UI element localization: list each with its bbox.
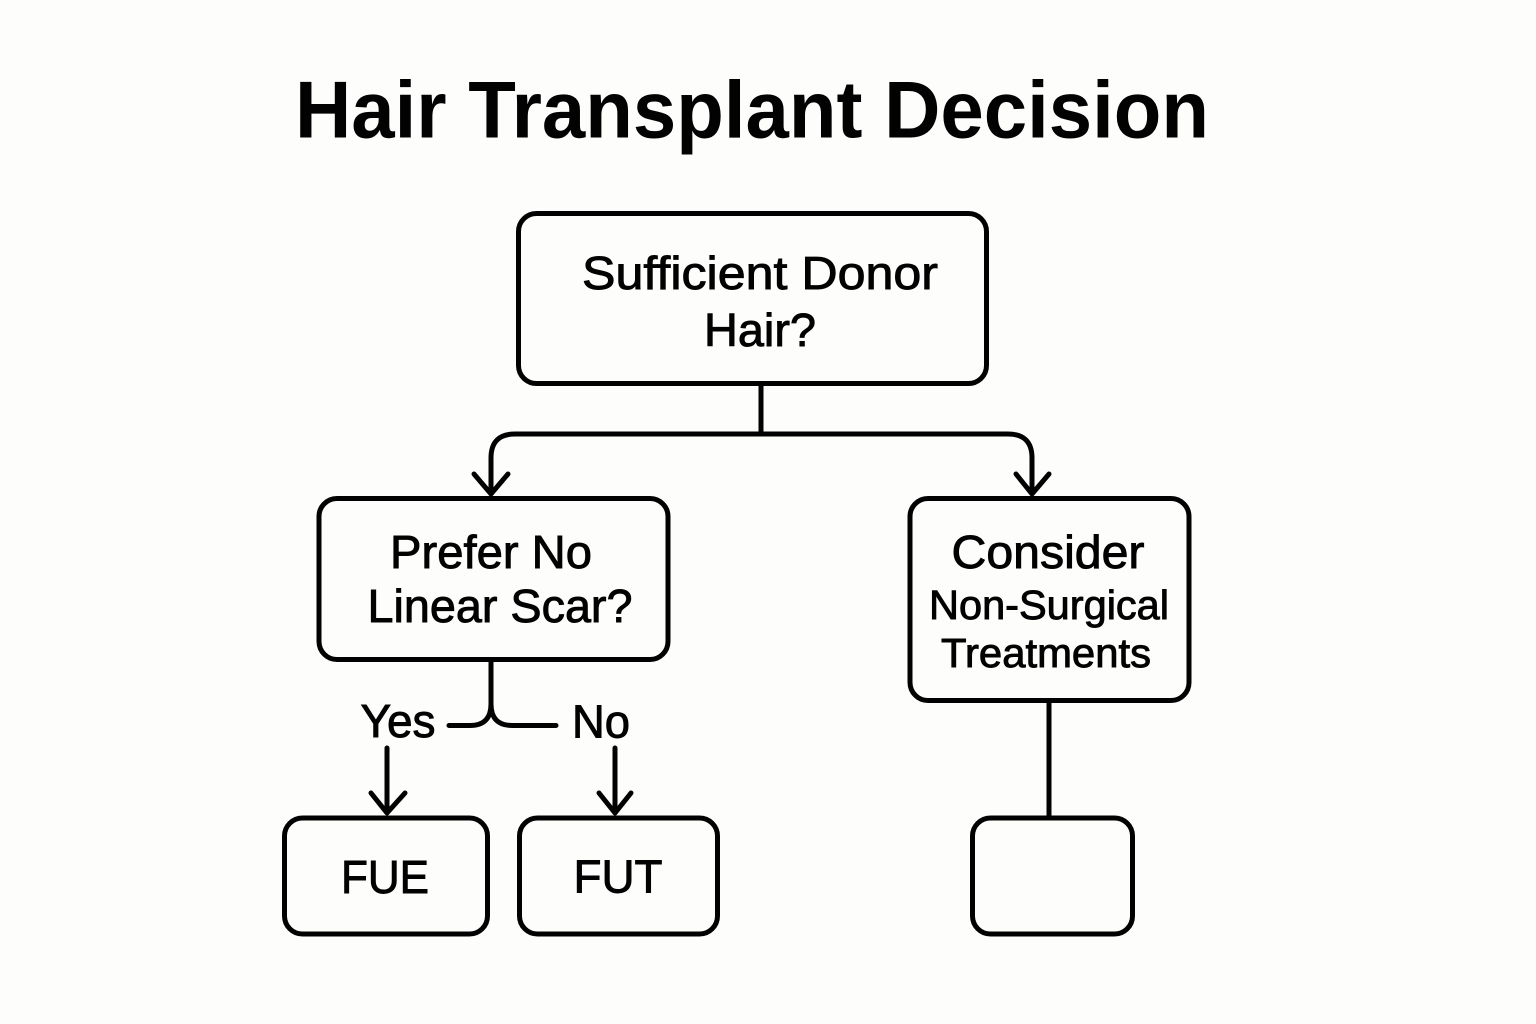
box: prefer no linear scar [319, 498, 668, 660]
arrow: yes to FUE [371, 748, 405, 813]
box: consider non-surgical treatments [910, 498, 1189, 700]
box: sufficient donor hair: Hair? [704, 304, 816, 356]
connector: root to branches [474, 385, 1049, 494]
box: consider non-surgical treatments: Non-Surgical [929, 582, 1169, 628]
title: Hair Transplant Decision [295, 66, 1209, 156]
box: FUE: FUE [341, 851, 429, 903]
connector: treatments to empty box [1046, 701, 1052, 817]
box: FUT [520, 818, 718, 934]
label: no: No [572, 696, 630, 748]
box: prefer no linear scar: Prefer No [390, 526, 592, 578]
connector: yes/no split [449, 660, 556, 726]
box: sufficient donor hair [518, 214, 986, 384]
box: FUE [284, 818, 488, 934]
box: sufficient donor hair: Sufficient Donor [582, 247, 938, 299]
box: empty [972, 818, 1132, 934]
box: FUT: FUT [574, 850, 662, 902]
label: yes: Yes [360, 695, 436, 747]
box: consider non-surgical treatments: Consider [952, 526, 1144, 578]
arrow: no to FUT [599, 748, 631, 813]
box: consider non-surgical treatments: Treatments [941, 630, 1151, 676]
box: prefer no linear scar: Linear Scar? [368, 580, 632, 632]
